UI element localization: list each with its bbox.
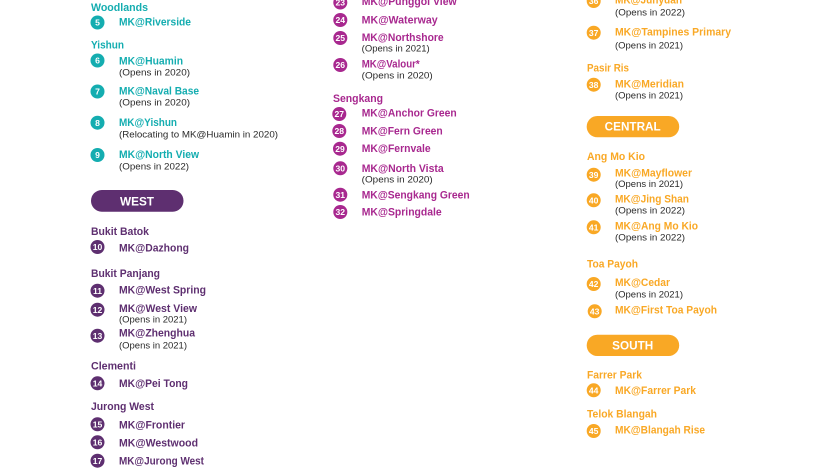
item 28 <box>332 124 443 138</box>
item 9 <box>90 148 200 172</box>
item 37 <box>587 26 731 50</box>
heading: Clementi: Clementi <box>91 361 136 373</box>
item 37: 37 <box>589 28 599 38</box>
item 27: 27 <box>335 109 344 119</box>
panel: east, central and south <box>587 0 731 438</box>
item 26: 26 <box>336 60 345 70</box>
item 12: 12 <box>93 305 102 315</box>
item 10: MK@Dazhong <box>119 243 189 255</box>
item 29 <box>333 142 431 156</box>
item 25: (Opens in 2021) <box>362 44 430 54</box>
item 39: (Opens in 2021) <box>615 179 683 189</box>
item 6: 6 <box>95 56 100 66</box>
item 36: (Opens in 2022) <box>615 8 685 18</box>
item 40: MK@Jing Shan <box>615 193 689 205</box>
item 38: MK@Meridian <box>615 78 684 90</box>
item 9: (Opens in 2022) <box>119 162 189 172</box>
item 7 <box>90 84 199 108</box>
region pill: CENTRAL: CENTRAL <box>605 122 661 134</box>
item 27: MK@Anchor Green <box>362 108 457 120</box>
item 13: 13 <box>93 331 102 341</box>
heading: Bukit Batok: Bukit Batok <box>91 226 149 238</box>
heading: Farrer Park: Farrer Park <box>587 369 642 381</box>
item 41: MK@Ang Mo Kio <box>615 220 699 232</box>
item 39 <box>587 168 692 189</box>
item 15: 15 <box>93 420 102 430</box>
item 26 <box>333 58 433 80</box>
item 24 <box>333 13 438 27</box>
heading: Bukit Panjang: Bukit Panjang <box>91 268 160 280</box>
item 13 <box>90 328 195 350</box>
item 31 <box>333 188 470 202</box>
item 25: MK@Northshore <box>362 32 444 44</box>
item 25 <box>333 31 444 54</box>
item 37: (Opens in 2021) <box>615 40 683 50</box>
item 44: MK@Farrer Park <box>615 385 696 397</box>
item 38 <box>587 78 684 101</box>
item 44: 44 <box>589 386 599 396</box>
panel: west <box>90 190 206 468</box>
item 14: 14 <box>93 378 102 388</box>
panel: north-east <box>332 0 470 219</box>
item 17: MK@Jurong West <box>119 455 204 467</box>
item 30: MK@North Vista <box>362 163 444 175</box>
item 30: (Opens in 2020) <box>362 175 433 185</box>
item 12 <box>90 303 198 324</box>
item 15: MK@Frontier <box>119 419 185 431</box>
item 6: MK@Huamin <box>119 56 183 68</box>
item 17 <box>90 454 204 468</box>
item 16: 16 <box>93 438 102 448</box>
item 11: MK@West Spring <box>119 285 206 297</box>
item 43: MK@First Toa Payoh <box>615 305 717 317</box>
item 40: 40 <box>589 196 599 206</box>
item 7: (Opens in 2020) <box>119 98 190 108</box>
item 10 <box>90 240 189 255</box>
item 16: MK@Westwood <box>119 437 198 449</box>
item 40 <box>587 193 689 215</box>
item 13: (Opens in 2021) <box>119 340 187 350</box>
item 8: 8 <box>95 118 100 128</box>
item 32: MK@Springdale <box>362 207 442 219</box>
heading: Woodlands: Woodlands <box>91 2 148 14</box>
item 43 <box>588 304 717 318</box>
item 23 <box>333 0 457 10</box>
item 6: (Opens in 2020) <box>119 68 190 78</box>
heading: Telok Blangah: Telok Blangah <box>587 409 657 421</box>
item 38: (Opens in 2021) <box>615 91 683 101</box>
item 31: MK@Sengkang Green <box>362 189 470 201</box>
item 41: 41 <box>589 222 599 232</box>
item 24: 24 <box>336 15 345 25</box>
item 31: 31 <box>336 190 345 200</box>
item 42: 42 <box>589 279 599 289</box>
item 7: 7 <box>95 87 100 97</box>
item 37: MK@Tampines Primary <box>615 27 731 39</box>
item 45 <box>587 424 705 438</box>
item 40: (Opens in 2022) <box>615 205 685 215</box>
item 9: MK@North View <box>119 149 200 161</box>
item 36 <box>587 0 685 18</box>
item 39: 39 <box>589 170 599 180</box>
item 8: (Relocating to MK@Huamin in 2020) <box>119 130 278 140</box>
item 30: 30 <box>336 164 345 174</box>
item 29: 29 <box>335 144 345 154</box>
heading: Yishun: Yishun <box>91 40 124 52</box>
item 24: MK@Waterway <box>362 14 438 26</box>
item 12: MK@West View <box>119 303 198 315</box>
item 14: MK@Pei Tong <box>119 378 188 390</box>
item 39: MK@Mayflower <box>615 168 692 180</box>
item 32 <box>333 205 442 219</box>
item 26: (Opens in 2020) <box>362 70 433 80</box>
region pill: CENTRAL <box>587 116 679 137</box>
heading: Toa Payoh: Toa Payoh <box>587 259 638 271</box>
item 26: MK@Valour* <box>362 58 421 70</box>
item 27 <box>332 107 457 121</box>
item 30 <box>333 161 444 185</box>
item 32: 32 <box>336 207 345 217</box>
item 17: 17 <box>93 456 102 466</box>
heading: Jurong West: Jurong West <box>91 401 154 413</box>
heading: Sengkang: Sengkang <box>333 93 383 105</box>
item 42: (Opens in 2021) <box>615 289 683 299</box>
region pill: WEST <box>91 190 184 212</box>
item 11: 11 <box>93 286 102 296</box>
item 16 <box>90 435 198 449</box>
item 29: MK@Fernvale <box>362 143 431 155</box>
item 6 <box>90 54 190 78</box>
item 10: 10 <box>93 242 102 252</box>
region pill: WEST: WEST <box>120 196 154 208</box>
heading: Pasir Ris: Pasir Ris <box>587 63 629 75</box>
item 7: MK@Naval Base <box>119 86 199 98</box>
item 14 <box>90 376 188 390</box>
item 41 <box>587 220 699 242</box>
item 8 <box>90 116 278 140</box>
item 44 <box>587 383 696 397</box>
item 38: 38 <box>589 80 599 90</box>
item 43: 43 <box>590 306 600 316</box>
item 8: MK@Yishun <box>119 117 177 129</box>
item 9: 9 <box>95 150 100 160</box>
item 5 <box>90 16 191 30</box>
item 25: 25 <box>336 33 345 43</box>
item 5: 5 <box>95 18 100 28</box>
item 15 <box>90 417 185 431</box>
region pill: SOUTH: SOUTH <box>612 340 653 352</box>
item 42 <box>587 277 683 299</box>
item 45: 45 <box>589 426 599 436</box>
item 28: 28 <box>335 126 344 136</box>
item 41: (Opens in 2022) <box>615 232 685 242</box>
item 45: MK@Blangah Rise <box>615 425 705 437</box>
item 28: MK@Fern Green <box>362 126 443 138</box>
item 11 <box>90 284 206 298</box>
region pill: SOUTH <box>587 335 679 356</box>
panel: north, continued <box>90 2 278 172</box>
item 13: MK@Zhenghua <box>119 328 195 340</box>
item 42: MK@Cedar <box>615 277 670 289</box>
item 12: (Opens in 2021) <box>119 314 187 324</box>
heading: Ang Mo Kio: Ang Mo Kio <box>587 151 646 163</box>
item 5: MK@Riverside <box>119 16 191 28</box>
